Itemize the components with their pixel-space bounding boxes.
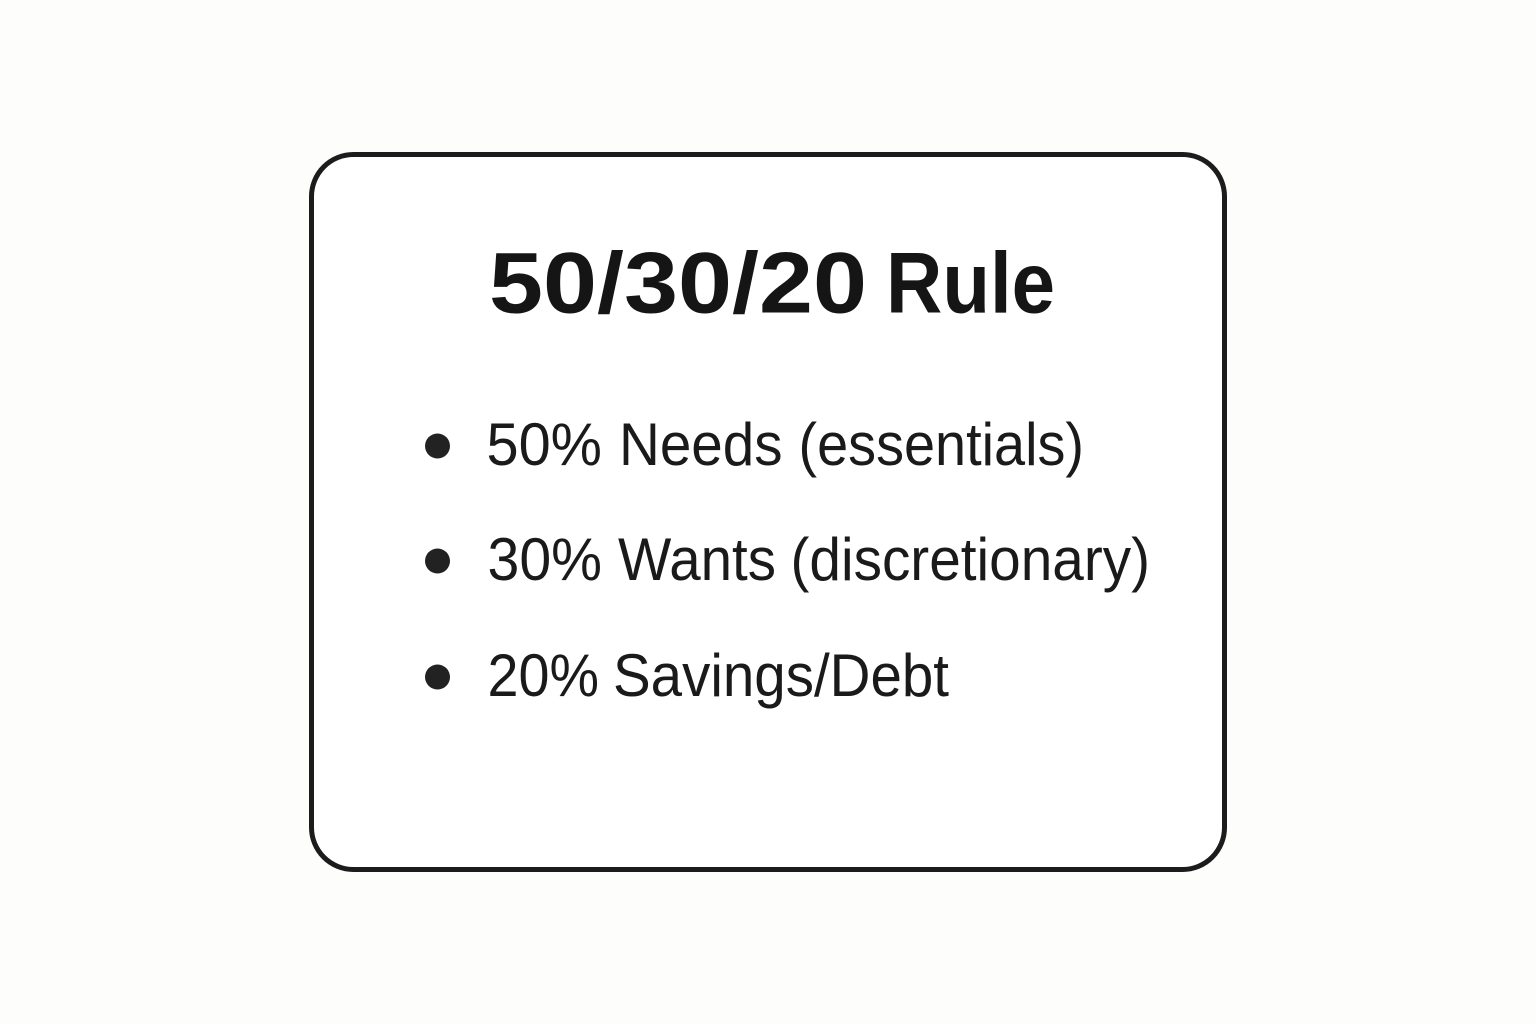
- bullet: [425, 548, 450, 574]
- text: wants: Wants: [618, 526, 776, 593]
- text: wants: (discretionary): [790, 526, 1150, 593]
- text: needs: 50%: [486, 411, 602, 478]
- text: needs: Needs: [619, 411, 782, 478]
- list item: needs: [425, 411, 1084, 478]
- text: savings: Savings/Debt: [613, 642, 949, 709]
- title: [489, 236, 1055, 332]
- bullet: [425, 434, 450, 458]
- text: needs: [486, 411, 1084, 478]
- list item: wants: [425, 526, 1150, 593]
- title: 50/30/20: [489, 236, 867, 332]
- text: savings: 20%: [488, 642, 599, 709]
- text: needs: (essentials): [798, 411, 1084, 478]
- bullet: [425, 664, 450, 690]
- text: wants: [488, 526, 1150, 593]
- text: savings: [488, 642, 949, 709]
- title: Rule: [886, 236, 1055, 332]
- panel: rule card: [312, 154, 1224, 870]
- list item: savings: [425, 642, 949, 709]
- text: wants: 30%: [488, 526, 602, 593]
